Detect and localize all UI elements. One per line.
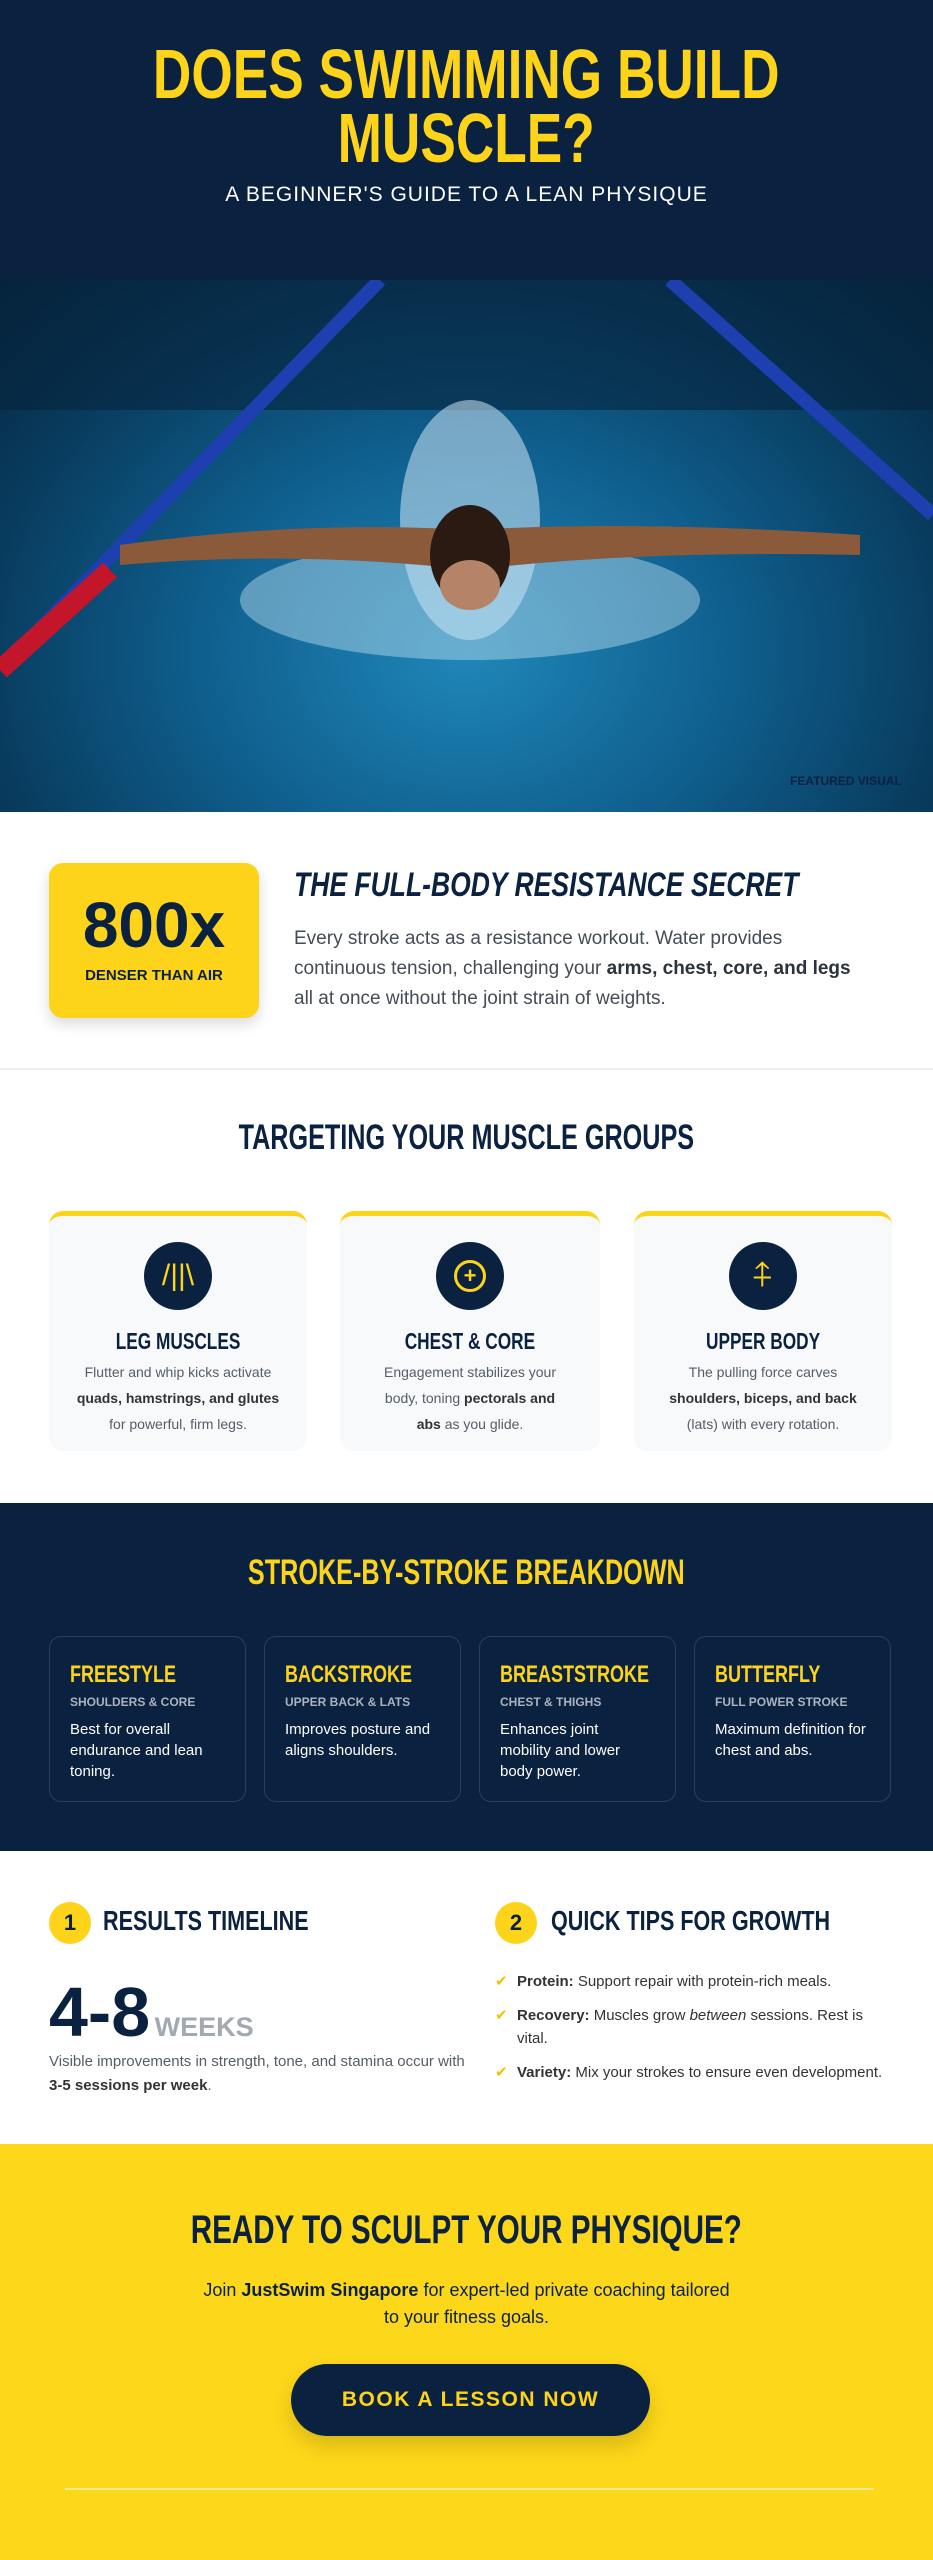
stat: 4-8 weeks: 4-8 WEEKS — [49, 1973, 254, 2051]
tips list: ✔ — [495, 2064, 508, 2081]
icon: target plus: + — [464, 1263, 476, 1288]
badge 2 + heading: 2 — [510, 1910, 522, 1935]
card: breaststroke: BREASTSTROKE — [500, 1661, 649, 1688]
panel: call to action — [0, 2144, 933, 2560]
card: freestyle: Best for overall endurance and lean toning. — [70, 1721, 203, 1780]
card: chest & core — [340, 1211, 600, 1451]
card: freestyle — [49, 1636, 246, 1802]
icon: arrow up: ⍏ — [753, 1256, 773, 1294]
card: upper body — [634, 1211, 892, 1451]
subtitle: A BEGINNER'S GUIDE TO A LEAN PHYSIQUE — [225, 183, 708, 206]
card: chest & core: CHEST & CORE — [405, 1328, 535, 1354]
description: Visible improvements in strength, tone, and stamina occur with 3-5 sessions per week. — [49, 2053, 465, 2094]
card: leg muscles — [49, 1211, 307, 1451]
icon: legs — [144, 1242, 212, 1310]
tips list: Recovery: Muscles grow between sessions. Rest is vital. — [517, 2007, 863, 2047]
stat box: 800x: 800x — [83, 889, 225, 961]
icon: legs: /||\ — [162, 1259, 194, 1292]
title: MUSCLE? — [338, 99, 595, 177]
panel: resistance secret — [0, 812, 933, 1070]
tips list: ✔ — [495, 2007, 508, 2024]
card: backstroke: BACKSTROKE — [285, 1661, 412, 1688]
stat box: 800x — [49, 863, 259, 1018]
badge 1 + heading — [49, 1902, 309, 1944]
photo: swimmer in pool — [0, 280, 933, 812]
title — [153, 35, 780, 177]
card: freestyle: FREESTYLE — [70, 1661, 176, 1688]
card: butterfly — [694, 1636, 891, 1802]
heading: targeting muscle groups: TARGETING YOUR MUSCLE GROUPS — [239, 1118, 694, 1157]
card: butterfly: Maximum definition for chest and abs. — [715, 1721, 866, 1759]
header — [0, 0, 933, 280]
icon: arrow up — [729, 1242, 797, 1310]
heading: READY TO SCULPT YOUR PHYSIQUE? — [191, 2208, 742, 2252]
card: butterfly: FULL POWER STROKE — [715, 1695, 847, 1709]
caption: featured visual: FEATURED VISUAL — [790, 774, 902, 788]
icon: target plus — [436, 1242, 504, 1310]
badge 1 + heading: RESULTS TIMELINE — [103, 1905, 309, 1936]
stat box: 800x: DENSER THAN AIR — [85, 967, 223, 984]
card: backstroke: UPPER BACK & LATS — [285, 1695, 410, 1709]
button: BOOK A LESSON NOW — [342, 2388, 599, 2411]
card: breaststroke: CHEST & THIGHS — [500, 1695, 601, 1709]
badge 1 + heading: 1 — [64, 1910, 76, 1935]
card: breaststroke: Enhances joint mobility and lower body power. — [500, 1721, 620, 1780]
card: backstroke — [264, 1636, 461, 1802]
tips list: Variety: Mix your strokes to ensure even development. — [517, 2064, 882, 2081]
card: upper body: UPPER BODY — [706, 1328, 820, 1354]
tips list: ✔ — [495, 1973, 508, 1990]
heading: THE FULL-BODY RESISTANCE SECRET — [294, 866, 798, 904]
body text: Every stroke acts as a resistance workout. Water provides continuous tension, challenging your arms, chest, core, and legs all at once without the joint strain of weights. — [294, 928, 851, 1009]
card: breaststroke — [479, 1636, 676, 1802]
card: chest & core: Engagement stabilizes your body, toning pectorals and abs as you glide. — [384, 1364, 556, 1432]
heading: STROKE-BY-STROKE BREAKDOWN — [248, 1553, 685, 1592]
card: freestyle: SHOULDERS & CORE — [70, 1695, 195, 1709]
panel: quick tips — [495, 1902, 882, 2081]
panel: results timeline — [49, 1902, 465, 2094]
card: butterfly: BUTTERFLY — [715, 1661, 820, 1688]
tips list: Protein: Support repair with protein-rich meals. — [517, 1973, 831, 1990]
panel: stroke breakdown — [0, 1503, 933, 1851]
title: DOES SWIMMING BUILD — [153, 35, 780, 113]
card: leg muscles: Flutter and whip kicks activate quads, hamstrings, and glutes for powerful, firm legs. — [77, 1364, 279, 1432]
badge 2 + heading: QUICK TIPS FOR GROWTH — [551, 1905, 830, 1936]
card: upper body: The pulling force carves shoulders, biceps, and back (lats) with every rotation. — [669, 1364, 857, 1432]
tips list — [495, 1973, 882, 2081]
card: backstroke: Improves posture and aligns shoulders. — [285, 1721, 430, 1759]
card: leg muscles: LEG MUSCLES — [116, 1328, 240, 1354]
text: Join JustSwim Singapore for expert-led private coaching tailored to your fitness goals. — [203, 2280, 730, 2327]
button — [291, 2364, 650, 2436]
badge 2 + heading — [495, 1902, 830, 1944]
